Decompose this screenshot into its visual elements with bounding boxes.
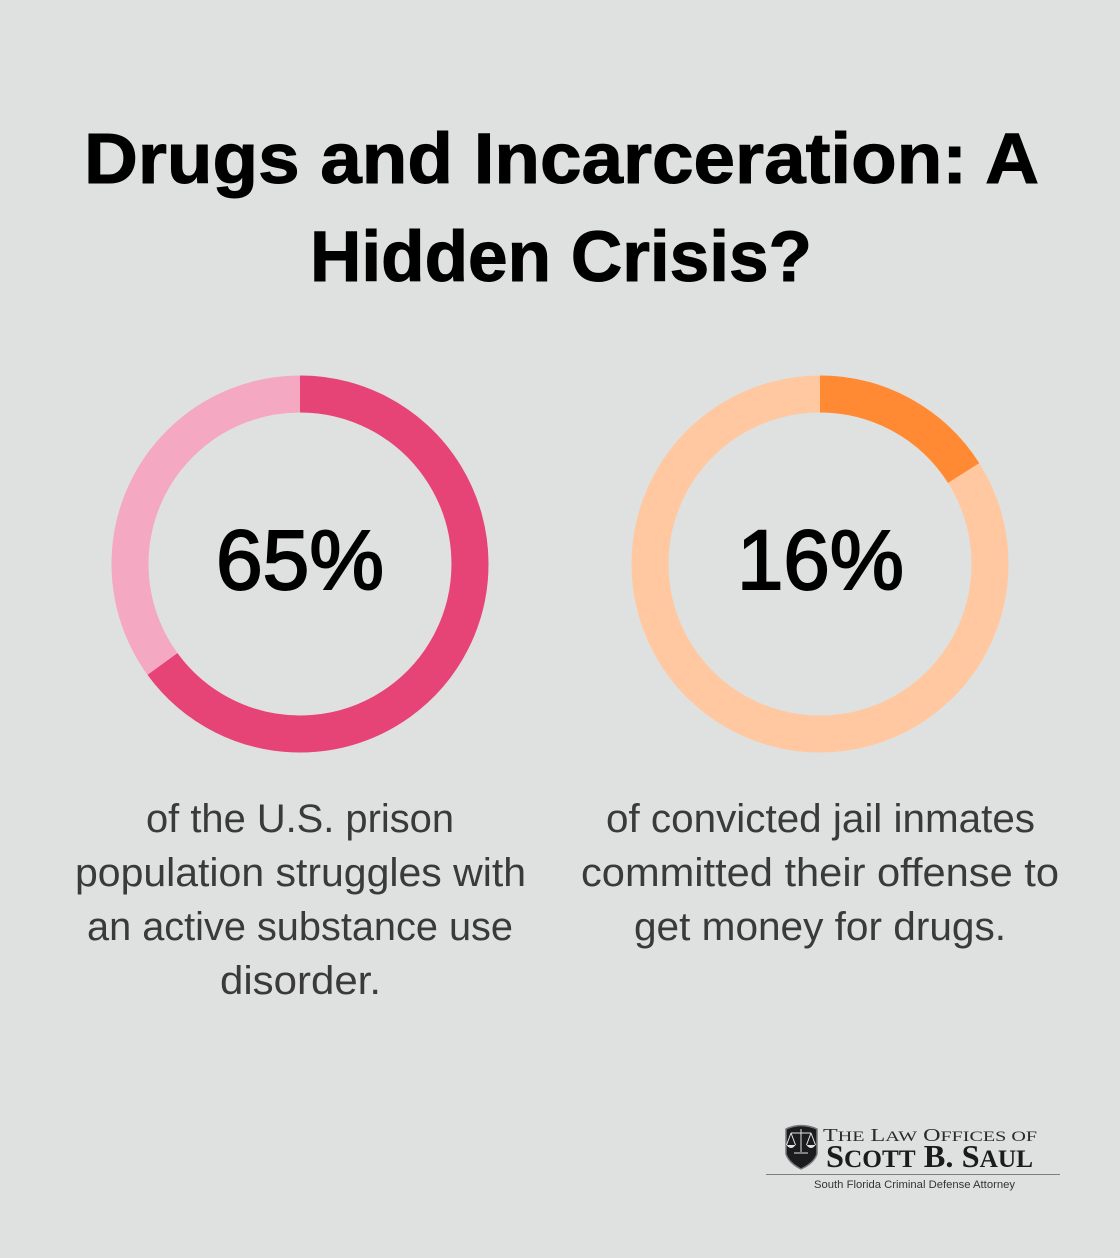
number: 65%: 65% (216, 513, 384, 607)
logo line: attorney name: SCOTT B. SAUL (826, 1138, 1033, 1174)
description: 16%: get money for drugs. (634, 905, 1006, 949)
panel: 65% statistic (75, 394, 526, 1003)
description: 65%: disorder. (220, 959, 381, 1003)
description: 65% (75, 797, 526, 1003)
panel: 16% statistic (581, 394, 1059, 949)
title: Hidden Crisis? (310, 218, 812, 297)
logo tagline: South Florida Criminal Defense Attorney (814, 1179, 1016, 1191)
title: Drugs and Incarceration: A (84, 120, 1039, 199)
donut chart: 16% (650, 394, 990, 734)
title (84, 120, 1039, 297)
donut chart: 65% (130, 394, 470, 734)
logo: The Law Offices of Scott B. Saul (766, 1125, 1060, 1191)
number: 16%: 16% (737, 513, 904, 607)
description: 16%: of convicted jail inmates (606, 797, 1035, 841)
description: 16%: committed their offense to (581, 851, 1059, 895)
logo line: firm name heading: THE L AW O FFICES OF (823, 1125, 1037, 1145)
icon: shield with scales (786, 1126, 817, 1169)
description: 16% (581, 797, 1059, 949)
description: 65%: an active substance use (87, 905, 513, 949)
logo rule (766, 1174, 1060, 1175)
description: 65%: population struggles with (75, 851, 526, 895)
description: 65%: of the U.S. prison (146, 797, 454, 841)
